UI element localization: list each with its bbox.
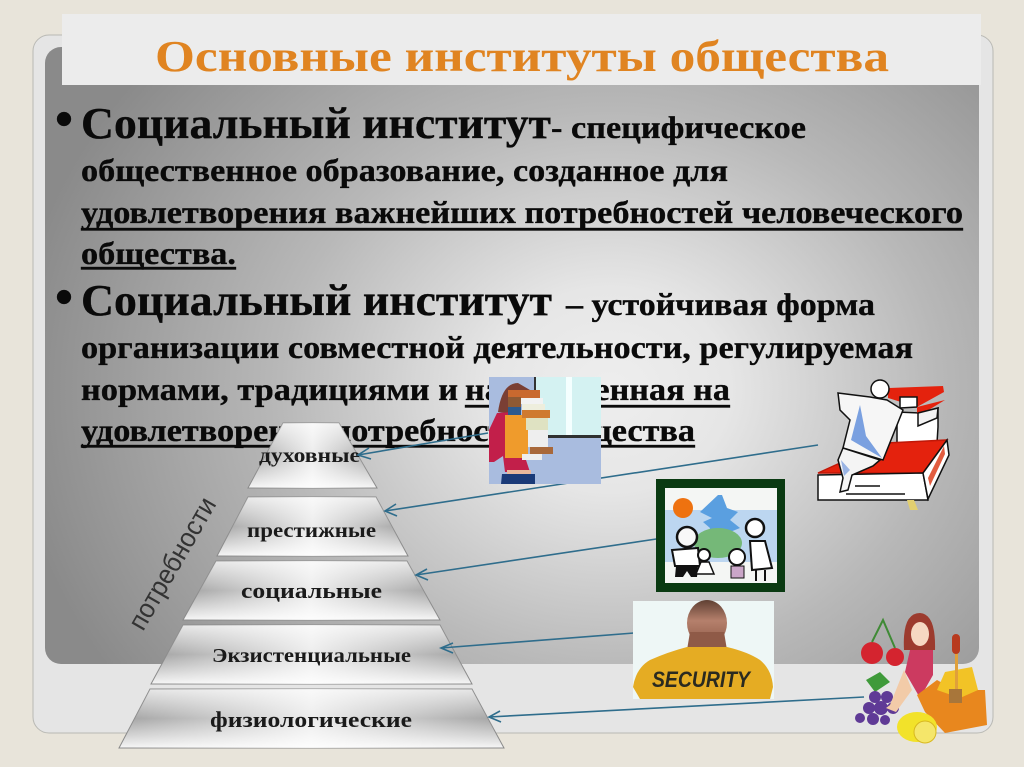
icon: security guard: SECURITY	[652, 667, 752, 692]
level: spiritual	[248, 423, 377, 488]
definition 2: нормами, традициями и	[81, 371, 458, 407]
grey content panel	[45, 47, 979, 664]
arrow to social	[416, 538, 663, 580]
definition 2: – устойчивая форма	[565, 286, 875, 322]
icon: family picture	[656, 479, 785, 592]
icon: security guard	[633, 600, 774, 699]
level: physiological: физиологические	[210, 707, 412, 732]
level: existential	[151, 625, 472, 684]
title: Основные институты общества	[155, 32, 889, 81]
level: social: социальные	[241, 578, 382, 603]
title band	[62, 14, 981, 85]
pyramid	[119, 423, 504, 748]
level: spiritual: духовные	[259, 445, 360, 467]
level: physiological	[119, 689, 504, 748]
definition 1: общества.	[81, 235, 236, 271]
rotated label: needs: потребности	[122, 492, 222, 635]
icon: student with books	[489, 377, 601, 484]
arrow to prestige	[385, 445, 818, 516]
definition 1: удовлетворения важнейших потребностей человеческого	[81, 194, 963, 230]
definition 2: удовлетворение потребностей общества	[81, 412, 695, 448]
arrow to existential	[441, 633, 634, 653]
definition 2: организации совместной деятельности, регулируемая	[81, 329, 913, 365]
definition 1: Социальный институт	[81, 99, 551, 148]
level: existential: Экзистенциальные	[212, 645, 411, 667]
arrow to spiritual	[358, 433, 488, 459]
icon: girl with food	[855, 613, 987, 743]
definition 1: - специфическое	[551, 109, 806, 145]
arrow to physiological	[489, 697, 864, 722]
definition 2	[57, 276, 913, 448]
definition 1	[57, 99, 963, 271]
level: prestige: престижные	[247, 520, 376, 542]
definition 2: направленная на	[465, 371, 730, 407]
level: prestige	[217, 497, 408, 556]
definition 1: общественное образование, созданное для	[81, 152, 728, 188]
definition 2: Социальный институт	[81, 276, 552, 325]
level: social	[183, 561, 440, 620]
icon: professor on books	[818, 380, 949, 510]
